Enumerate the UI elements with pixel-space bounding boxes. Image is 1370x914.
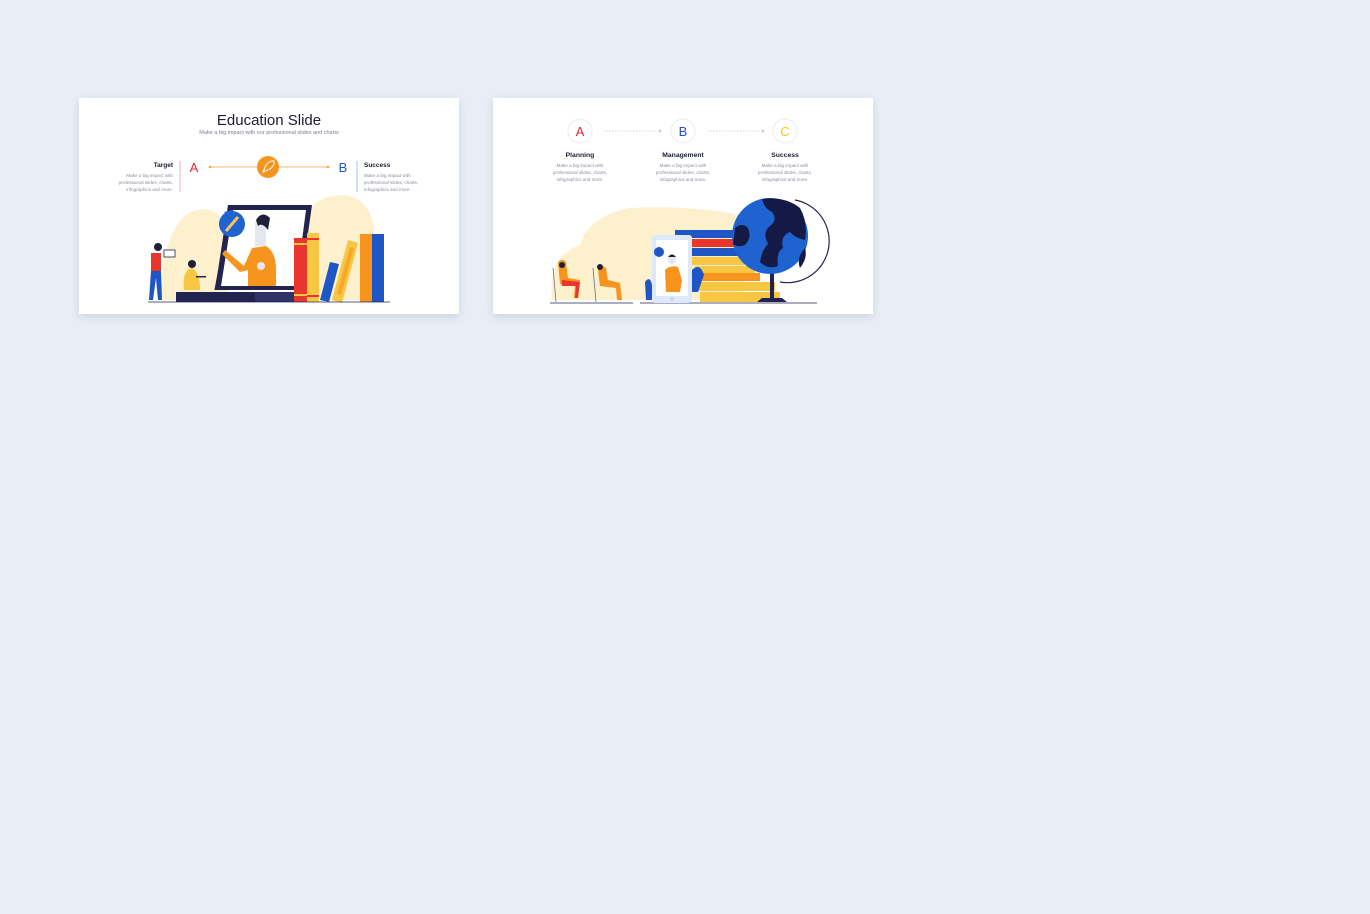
title: Education Slide bbox=[217, 112, 321, 129]
letter B: B bbox=[339, 160, 347, 175]
arrow B to C bbox=[707, 129, 765, 133]
step A: planning: Make a big impact with bbox=[557, 163, 604, 168]
text block: success: infographics and more. bbox=[364, 187, 411, 192]
text block: success: Make a big impact with bbox=[364, 173, 411, 178]
text block: target: infographics and more. bbox=[126, 187, 173, 192]
step B: management: professional slides, charts, bbox=[656, 170, 710, 175]
step B: management: Make a big impact with bbox=[660, 163, 707, 168]
step C: success: Make a big impact with bbox=[762, 163, 809, 168]
arrow A to B bbox=[603, 129, 662, 133]
text block: success: professional slides, charts, bbox=[364, 180, 418, 185]
illustration: online learning with globe bbox=[550, 198, 829, 303]
step B: management: Management bbox=[662, 152, 705, 159]
text block: success: Success bbox=[364, 162, 391, 169]
text block: target: Target bbox=[154, 162, 174, 169]
step C: success: C bbox=[780, 124, 790, 139]
step A: planning bbox=[553, 119, 607, 182]
illustration: classroom bbox=[148, 195, 390, 303]
text block: success bbox=[357, 161, 418, 192]
step A: planning: infographics and more. bbox=[557, 177, 603, 182]
step B: management: B bbox=[679, 124, 687, 139]
letter A: A bbox=[190, 160, 199, 175]
subtitle: Make a big impact with our professional slides and charts bbox=[199, 130, 339, 136]
globe bbox=[780, 200, 829, 283]
step C: success: Success bbox=[771, 152, 799, 159]
step A: planning: A bbox=[576, 124, 585, 139]
text block: target: Make a big impact with bbox=[126, 173, 173, 178]
step A: planning: professional slides, charts, bbox=[553, 170, 607, 175]
panel: education slide 2 bbox=[493, 98, 873, 314]
text block: target: professional slides, charts, bbox=[119, 180, 173, 185]
step C: success bbox=[758, 119, 812, 182]
step B: management: infographics and more. bbox=[660, 177, 706, 182]
step B: management bbox=[656, 119, 710, 182]
text block: target bbox=[119, 161, 180, 192]
step C: success: infographics and more. bbox=[762, 177, 808, 182]
arrow line with rocket icon bbox=[209, 156, 329, 178]
panel: education slide 1 bbox=[79, 98, 459, 314]
step A: planning: Planning bbox=[566, 152, 594, 159]
step C: success: professional slides, charts, bbox=[758, 170, 812, 175]
